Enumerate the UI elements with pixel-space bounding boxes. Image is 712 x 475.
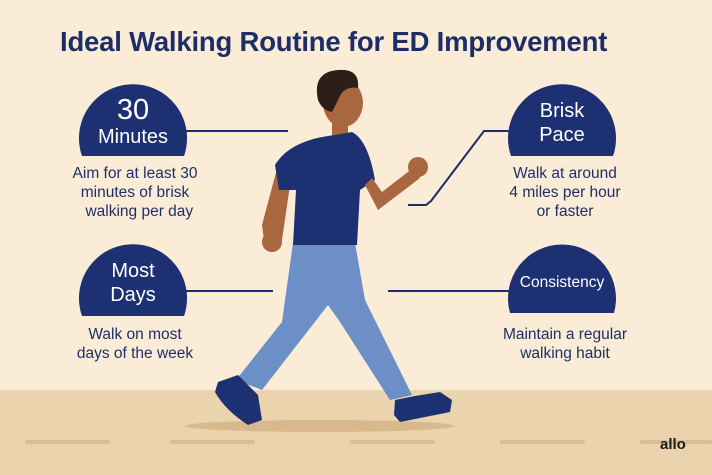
badge: 30 Minutes: [98, 94, 168, 148]
badge: Brisk Pace: Brisk: [540, 100, 584, 122]
badge: 30 Minutes: Minutes: [98, 126, 168, 148]
text: brisk pace: or faster: [537, 203, 593, 220]
shoes: [215, 375, 262, 425]
badge: Brisk Pace: Pace: [539, 124, 585, 146]
badge: Consistency: Consistency: [520, 274, 604, 291]
text: most days: [77, 326, 194, 362]
figure: walking man: [215, 70, 452, 425]
text: brisk pace: Walk at around: [513, 165, 617, 182]
title: Ideal Walking Routine for ED Improvement: [60, 26, 607, 57]
text: brisk pace: 4 miles per hour: [509, 184, 621, 201]
text: consistency: Maintain a regular: [503, 326, 627, 343]
pants: [236, 243, 412, 400]
badge: Most Days: Most: [111, 260, 155, 282]
text: most days: days of the week: [77, 345, 193, 362]
head: [323, 79, 363, 127]
badge: 30 Minutes: 30: [117, 94, 149, 126]
floor: [0, 390, 712, 475]
text: 30 minutes: [72, 165, 197, 220]
text: consistency: walking habit: [520, 345, 610, 362]
text: most days: Walk on most: [88, 326, 182, 343]
text: 30 minutes: walking per day: [85, 203, 193, 220]
back arm: [262, 165, 290, 240]
text: consistency: [503, 326, 627, 362]
badge: Most Days: [110, 260, 156, 306]
badge: Brisk Pace: [539, 100, 585, 146]
badge shapes: [79, 84, 616, 316]
badge: Most Days: Days: [110, 284, 156, 306]
neck: [332, 118, 348, 140]
shirt: [275, 132, 375, 245]
text: 30 minutes: minutes of brisk: [81, 184, 189, 201]
text: 30 minutes: Aim for at least 30: [73, 165, 197, 182]
floor dashes: [25, 440, 712, 444]
logo: allo: [660, 436, 686, 453]
connector lines: [185, 131, 510, 291]
front arm: [365, 168, 420, 210]
text: brisk pace: [509, 165, 621, 220]
shadow: [185, 420, 455, 432]
